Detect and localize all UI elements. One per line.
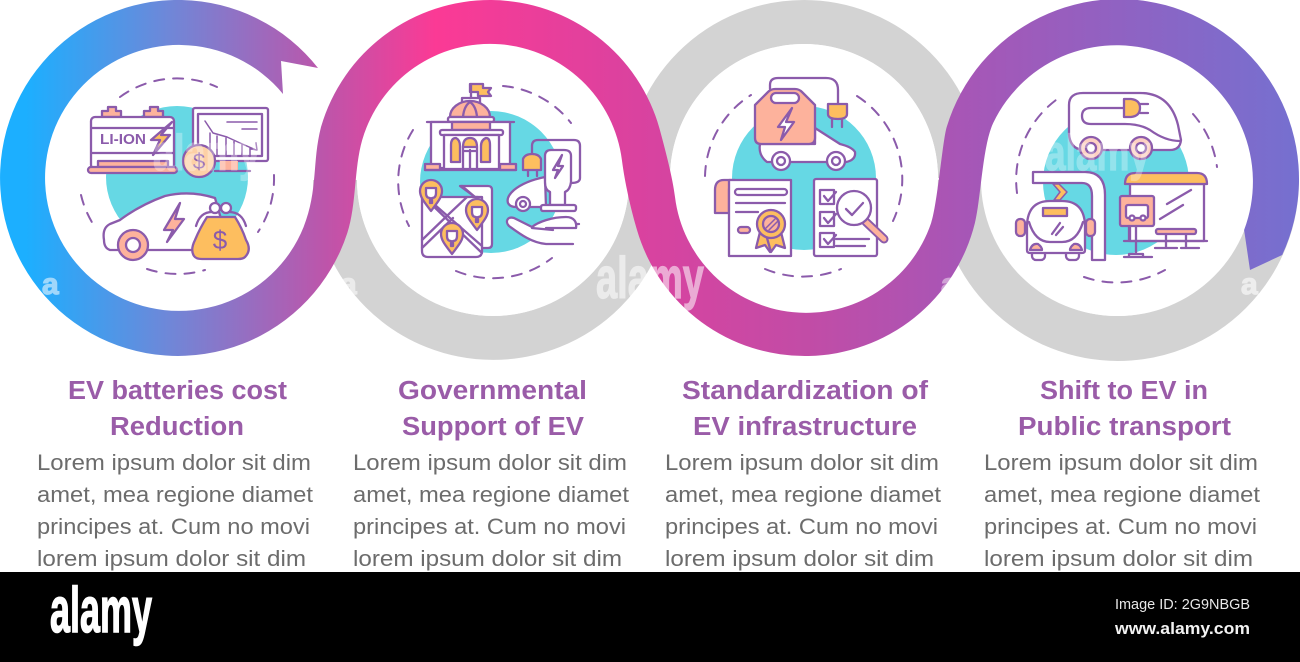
heading: Shift to EV in public transport: Public transport [1018,413,1232,441]
text block: column 2: principes at. Cum no movi [353,514,626,539]
text block: column 3: lorem ipsum dolor sit dim [665,546,934,571]
heading: Standardization of EV infrastructure: Standardization of [682,377,929,405]
watermark: a [1241,268,1258,301]
text block: column 3: principes at. Cum no movi [665,514,938,539]
text block: column 3: Lorem ipsum dolor sit dim [665,450,939,475]
watermark: alamy [1045,125,1150,181]
text block: column 2: lorem ipsum dolor sit dim [353,546,622,571]
watermark [42,125,1258,311]
text block: column 3 [665,450,942,571]
heading: EV batteries cost reduction: EV batteries cost [68,377,288,405]
heading: EV batteries cost reduction: Reduction [110,413,244,441]
heading: Standardization of EV infrastructure [682,377,929,441]
text block: column 2: Lorem ipsum dolor sit dim [353,450,627,475]
text block: column 1: amet, mea regione diamet [37,482,314,507]
text block: column 2 [353,450,630,571]
text block: column 1: principes at. Cum no movi [37,514,310,539]
icon: standardization of infrastructure [705,78,902,277]
heading: Standardization of EV infrastructure: EV infrastructure [693,413,917,441]
text block: column 1: Lorem ipsum dolor sit dim [37,450,311,475]
heading: Shift to EV in public transport: Shift to EV in [1040,377,1208,405]
white circle backgrounds [45,44,1253,316]
footer bar: alamy [50,574,152,646]
icon: government support [398,84,580,278]
footer bar: Image ID: 2G9NBGB [1115,596,1250,613]
watermark: a [340,268,357,301]
text block: column 4: Lorem ipsum dolor sit dim [984,450,1258,475]
heading: Shift to EV in public transport [1018,377,1232,441]
grey rings behind the ribbon [335,22,1276,339]
gradient ribbon with arrow ends [0,0,1299,356]
footer bar: www.alamy.com [1114,619,1250,638]
icon: battery cost reduction: $ [193,149,205,174]
heading: Governmental support of EV [398,377,587,441]
text block: column 3: amet, mea regione diamet [665,482,942,507]
text block: column 1 [37,450,314,571]
icon: battery cost reduction: $ [213,225,228,255]
heading: Governmental support of EV: Governmental [398,377,587,405]
heading: EV batteries cost reduction [68,377,288,441]
footer bar [0,572,1300,662]
heading: Governmental support of EV: Support of EV [402,413,584,441]
text block: column 2: amet, mea regione diamet [353,482,630,507]
icon: battery cost reduction: LI-ION [100,132,146,148]
watermark: a [42,268,59,301]
text block: column 4: lorem ipsum dolor sit dim [984,546,1253,571]
text block: column 4 [984,450,1261,571]
icon: battery cost reduction [81,78,274,274]
watermark: a [941,268,958,301]
watermark: alamy [153,125,260,181]
icon: public transport [1016,93,1217,282]
text block: column 1: lorem ipsum dolor sit dim [37,546,306,571]
watermark: alamy [596,246,704,311]
text block: column 4: principes at. Cum no movi [984,514,1257,539]
text block: column 4: amet, mea regione diamet [984,482,1261,507]
